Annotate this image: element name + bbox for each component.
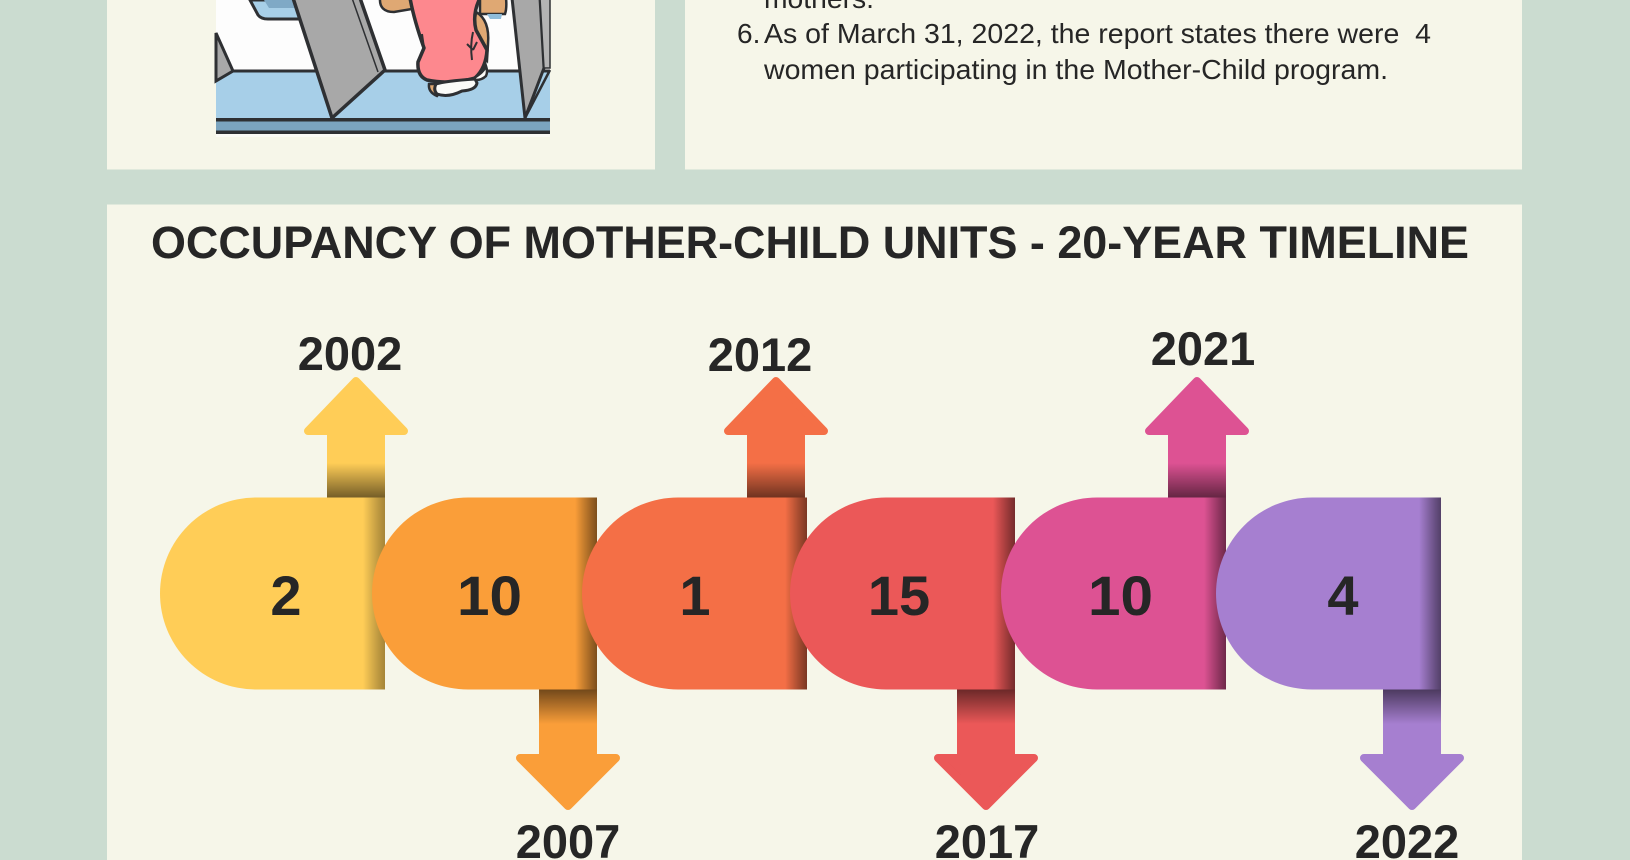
segment: 2017 value 15: 15 xyxy=(868,564,930,627)
list item 6 xyxy=(737,18,1431,85)
panel: illustration card xyxy=(107,0,655,170)
segment: 2002 value 2: 2 xyxy=(270,564,302,627)
illustration: child at cell doors xyxy=(216,0,550,137)
arrow: 2007 down xyxy=(520,689,616,806)
heading: timeline title: OCCUPANCY OF MOTHER-CHILD UNITS - 20-YEAR TIMELINE xyxy=(151,217,1469,268)
panel: timeline card xyxy=(107,204,1522,860)
arrow: 2002 up xyxy=(308,381,404,498)
segment: 2017 value 15 xyxy=(790,498,1015,690)
list item 6: women participating in the Mother-Child program. xyxy=(763,54,1388,85)
list item 6: 6. xyxy=(737,18,760,49)
label: year 2012: 2012 xyxy=(708,328,812,381)
segment: 2021 value 10: 10 xyxy=(1088,564,1153,627)
arrow: 2012 up xyxy=(728,381,824,498)
segment: 2012 value 1 xyxy=(582,498,807,690)
segment: 2021 value 10 xyxy=(1001,498,1226,690)
segment: 2007 value 10: 10 xyxy=(457,564,522,627)
arrow: 2022 down xyxy=(1364,689,1460,806)
panel: report findings card xyxy=(685,0,1522,170)
label: year 2002: 2002 xyxy=(298,327,402,380)
segment: 2022 value 4 xyxy=(1216,498,1441,690)
arrow: 2017 down xyxy=(938,689,1034,806)
segment: 2002 value 2 xyxy=(160,498,385,690)
list item 6: As of March 31, 2022, the report states there were 4 xyxy=(764,18,1431,49)
segment: 2012 value 1: 1 xyxy=(679,564,711,627)
arrow: 2021 up xyxy=(1149,381,1245,498)
label: year 2021: 2021 xyxy=(1151,322,1255,375)
segment: 2007 value 10 xyxy=(372,498,597,690)
segment: 2022 value 4: 4 xyxy=(1327,564,1359,627)
